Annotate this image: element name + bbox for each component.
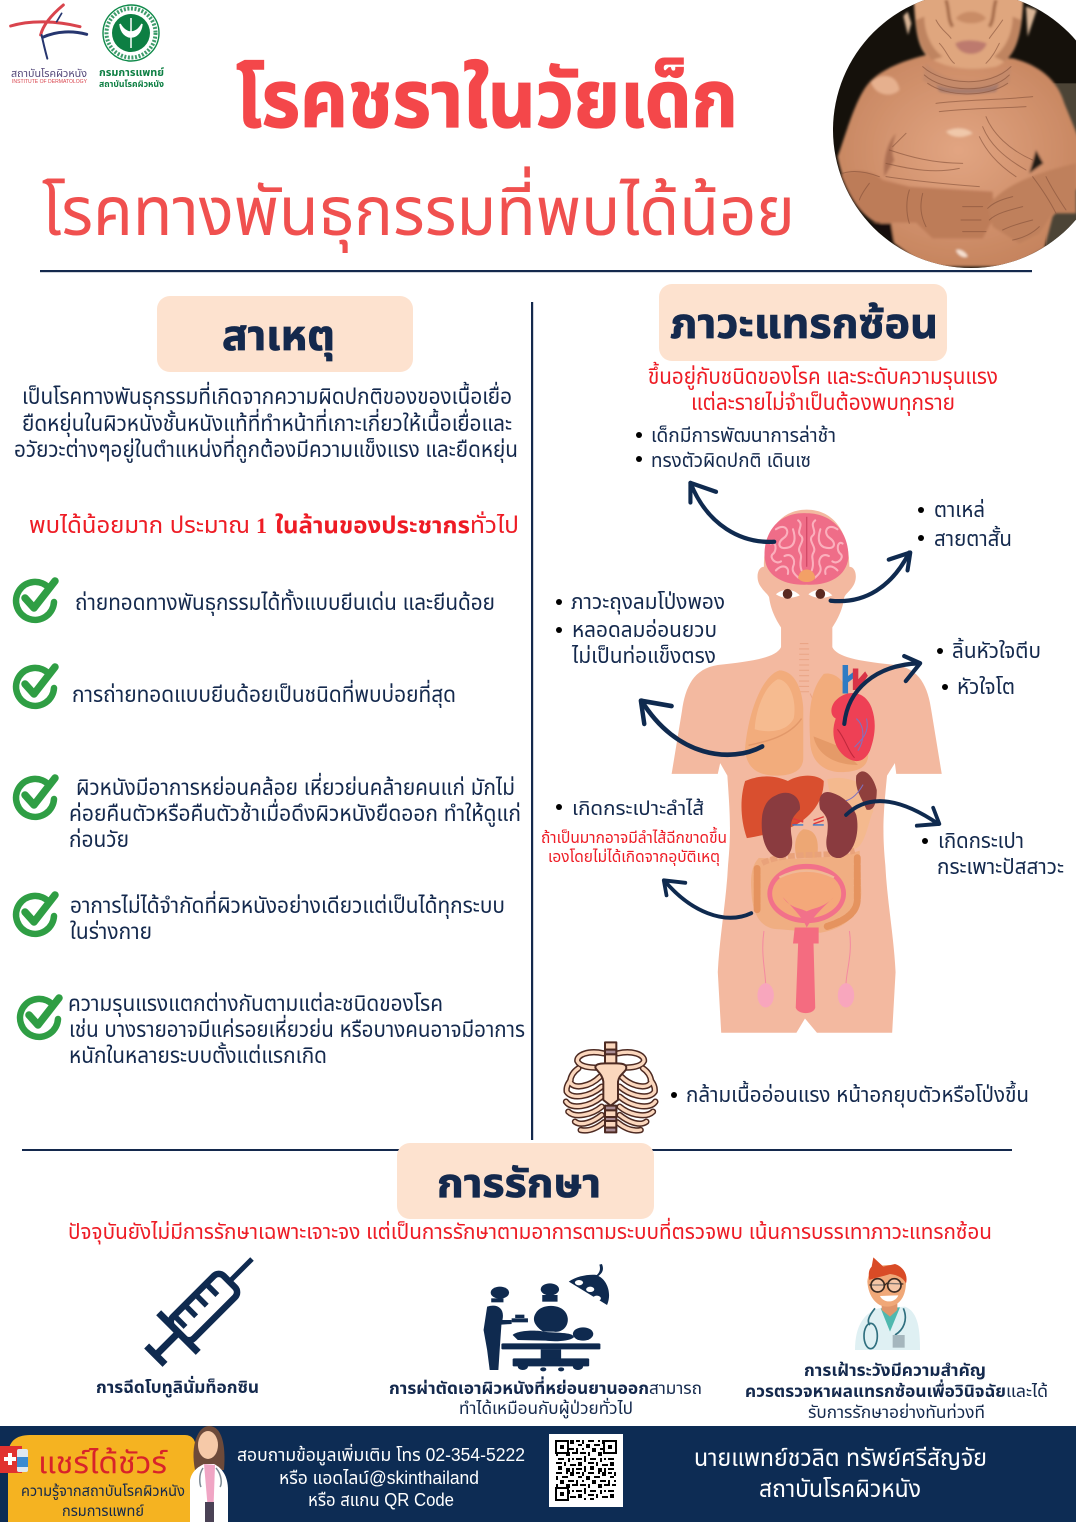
icon: syringe xyxy=(136,1239,272,1375)
bullets: heart xyxy=(937,637,1041,699)
icon: first aid kit xyxy=(0,1446,28,1473)
check item 3: ผิวหนังมีอาการหย่อนคล้อย เหี่ยวย่นคล้ายคนแก่ มักไม่ xyxy=(76,772,515,800)
presenter credit: สถาบันโรคผิวหนัง xyxy=(759,1476,921,1503)
icon: surgery team xyxy=(484,1264,609,1371)
bullets: bladder xyxy=(922,830,1064,879)
causes description: อวัยวะต่างๆอยู่ในตำแหน่งที่ถูกต้องมีความแข็งแรง และยืดหยุ่น xyxy=(14,434,518,463)
heading: treatment: การรักษา xyxy=(437,1162,601,1206)
prevalence callout: ในล้านของประชากร xyxy=(275,512,470,538)
panel: complications xyxy=(541,284,1064,1132)
bullets: eyes: สายตาสั้น xyxy=(934,525,1012,551)
panel: treatment xyxy=(68,1143,1048,1422)
arrow: bladder complications xyxy=(846,801,939,826)
check item 4: อาการไม่ได้จำกัดที่ผิวหนังอย่างเดียวแต่เป็นได้ทุกระบบ xyxy=(70,890,505,919)
treatment item: monitoring: การเฝ้าระวังมีความสำคัญ xyxy=(804,1361,986,1380)
subtitle: โรคทางพันธุกรรมที่พบได้น้อย xyxy=(42,166,795,253)
brain xyxy=(765,513,848,585)
prevalence callout: 1 xyxy=(256,513,267,538)
bullets: lungs xyxy=(556,591,725,668)
bullets: bladder: เกิดกระเปา xyxy=(938,830,1024,853)
title: โรคชราในวัยเด็ก xyxy=(236,55,738,144)
treatment item: botulinum toxin xyxy=(96,1239,272,1398)
kidneys xyxy=(762,792,857,858)
check item 1: ถ่ายทอดทางพันธุกรรมได้ทั้งแบบยีนเด่น และยีนด้อย xyxy=(75,588,495,616)
treatment item: monitoring xyxy=(745,1257,1048,1422)
check item 2 xyxy=(16,667,456,708)
arrow: heart complications xyxy=(844,656,920,724)
check item 2: การถ่ายทอดแบบยีนด้อยเป็นชนิดที่พบบ่อยที่สุด xyxy=(72,679,456,708)
check item 3 xyxy=(16,772,521,852)
check item 5: หนักในหลายระบบตั้งแต่แรกเกิด xyxy=(69,1041,327,1068)
photo: child with wrinkled skin xyxy=(826,0,1076,277)
causes description: เป็นโรคทางพันธุกรรมที่เกิดจากความผิดปกติของของเนื้อเยื่อ xyxy=(22,381,512,410)
check item 4: ในร่างกาย xyxy=(70,919,152,944)
check item 5: เช่น บางรายอาจมีแค่รอยเหี่ยวย่น หรือบางคนอาจมีอาการ xyxy=(69,1014,525,1042)
bullets: intestine: เองโดยไม่ได้เกิดจากอุบัติเหตุ xyxy=(548,848,720,866)
prevalence callout: พบได้น้อยมาก ประมาณ xyxy=(29,512,250,538)
heading: complications: ภาวะแทรกซ้อน xyxy=(670,300,938,347)
arrow: intestine complications xyxy=(664,880,751,918)
prevalence callout: ทั่วไป xyxy=(470,510,519,538)
stomach and spleen xyxy=(827,771,877,849)
bullets: intestine: เกิดกระเปาะลำไส้ xyxy=(572,797,704,820)
presenter credit: นายแพทย์ชวลิต ทรัพย์ศรีสัญจัย xyxy=(694,1445,987,1472)
arrow: brain complications xyxy=(690,483,774,542)
presenter credit xyxy=(694,1445,987,1503)
arrow: lung complications xyxy=(641,701,762,755)
lungs xyxy=(745,670,868,776)
bullets: heart: หัวใจโต xyxy=(957,676,1015,699)
treatment item: surgery: สามารถ xyxy=(649,1379,702,1398)
check item 1 xyxy=(16,581,495,620)
bullets: lungs: หลอดลมอ่อนยวบ xyxy=(572,618,717,642)
bullets: heart: ลิ้นหัวใจตีบ xyxy=(952,637,1041,663)
logo: institute of dermatology: สถาบันโรคผิวหนัง xyxy=(11,68,87,80)
share panel: ความรู้จากสถาบันโรคผิวหนัง xyxy=(21,1483,185,1500)
bullets: lungs: ไม่เป็นท่อแข็งตรง xyxy=(571,643,716,668)
check item 3: ก่อนวัย xyxy=(69,827,129,852)
heading: complications xyxy=(659,284,947,361)
heading: causes: สาเหตุ xyxy=(222,312,335,361)
bullets: development: เด็กมีการพัฒนาการล่าช้า xyxy=(651,424,836,447)
liver xyxy=(741,776,824,838)
bullets: development xyxy=(636,424,836,472)
logo: institute of dermatology: INSTITUTE OF DERMATOLOGY xyxy=(12,79,88,85)
treatment item: surgery xyxy=(389,1264,702,1420)
panel: causes xyxy=(14,296,525,1068)
renal vessels xyxy=(793,817,824,824)
treatment item: botulinum toxin: การฉีดโบทูลินั่มท็อกซิน xyxy=(96,1376,259,1398)
reproductive organs xyxy=(757,927,854,1013)
divider under title xyxy=(40,270,1032,272)
causes description xyxy=(14,381,518,463)
prevalence callout xyxy=(29,510,519,538)
ribcage caption: กล้ามเนื้ออ่อนแรง หน้าอกยุบตัวหรือโป่งขึ้น xyxy=(686,1080,1029,1108)
icon: female doctor xyxy=(190,1426,228,1522)
contact text: หรือ แอดไลน์@skinthailand xyxy=(279,1468,479,1488)
share panel xyxy=(0,1426,228,1522)
check item 5: ความรุนแรงแตกต่างกันตามแต่ละชนิดของโรค xyxy=(68,991,443,1017)
trachea xyxy=(795,644,814,701)
logo: department of medical services seal: กรมการแพทย์ xyxy=(99,67,164,79)
arrow: eye complications xyxy=(831,552,910,601)
causes description: ยืดหยุ่นในผิวหนังชั้นหนังแท้ที่ทำหน้าที่เกาะเกี่ยวให้เนื้อเยื่อและ xyxy=(22,408,512,437)
logo: department of medical services seal xyxy=(99,5,164,89)
eyes xyxy=(776,589,832,599)
check item 3: ค่อยคืนตัวหรือคืนตัวช้าเมื่อดึงผิวหนังยืดออก ทำให้ดูแก่ xyxy=(69,798,521,827)
heading: treatment xyxy=(397,1143,654,1219)
bullets: eyes xyxy=(918,498,1012,551)
share panel: แชร์ได้ชัวร์ xyxy=(38,1447,169,1480)
bladder xyxy=(770,866,844,927)
bullets: intestine: ถ้าเป็นมากอาจมีลำไส้ฉีกขาดขึ้น xyxy=(541,826,727,847)
logo: institute of dermatology xyxy=(11,5,88,85)
heart xyxy=(831,665,875,761)
footer bar xyxy=(0,1426,1076,1522)
icon: doctor xyxy=(855,1257,920,1350)
body silhouette xyxy=(672,510,942,1033)
bullets: bladder: กระเพาะปัสสาวะ xyxy=(937,856,1064,879)
body diagram xyxy=(641,483,942,1033)
treatment item: monitoring: รับการรักษาอย่างทันท่วงที xyxy=(808,1403,985,1422)
heading: causes xyxy=(157,296,413,372)
treatment item: monitoring: และได้ xyxy=(1006,1381,1048,1401)
bullets: development: ทรงตัวผิดปกติ เดินเซ xyxy=(651,450,811,472)
intestines xyxy=(751,829,861,933)
treatment item: surgery: การผ่าตัดเอาผิวหนังที่หย่อนยานออก xyxy=(389,1376,649,1398)
bullets: intestine xyxy=(541,797,727,866)
bullets: eyes: ตาเหล่ xyxy=(934,498,985,522)
treatment item: surgery: ทำได้เหมือนกับผู้ป่วยทั่วไป xyxy=(459,1397,633,1420)
treatment note: ปัจจุบันยังไม่มีการรักษาเฉพาะเจาะจง แต่เป็นการรักษาตามอาการตามระบบที่ตรวจพบ เน้นการบรรเทาภาวะแทรกซ้อน xyxy=(68,1217,992,1245)
treatment item: monitoring: ควรตรวจหาผลแทรกซ้อนเพื่อวินิจฉัย xyxy=(745,1379,1006,1401)
share panel: กรมการแพทย์ xyxy=(62,1503,144,1520)
check item 5 xyxy=(20,991,525,1068)
icon: ribcage xyxy=(566,1042,655,1132)
complications note xyxy=(648,361,998,416)
contact text: สอบถามข้อมูลเพิ่มเติม โทร 02-354-5222 xyxy=(237,1443,525,1467)
contact text: หรือ สแกน QR Code xyxy=(308,1490,454,1510)
bullets: lungs: ภาวะถุงลมโป่งพอง xyxy=(571,591,725,615)
check item 4 xyxy=(16,890,505,944)
contact text xyxy=(237,1443,525,1510)
logo: department of medical services seal: สถาบันโรคผิวหนัง xyxy=(99,79,164,89)
complications note: แต่ละรายไม่จำเป็นต้องพบทุกราย xyxy=(691,390,955,416)
complications note: ขึ้นอยู่กับชนิดของโรค และระดับความรุนแรง xyxy=(648,361,998,390)
QR code xyxy=(549,1434,623,1507)
